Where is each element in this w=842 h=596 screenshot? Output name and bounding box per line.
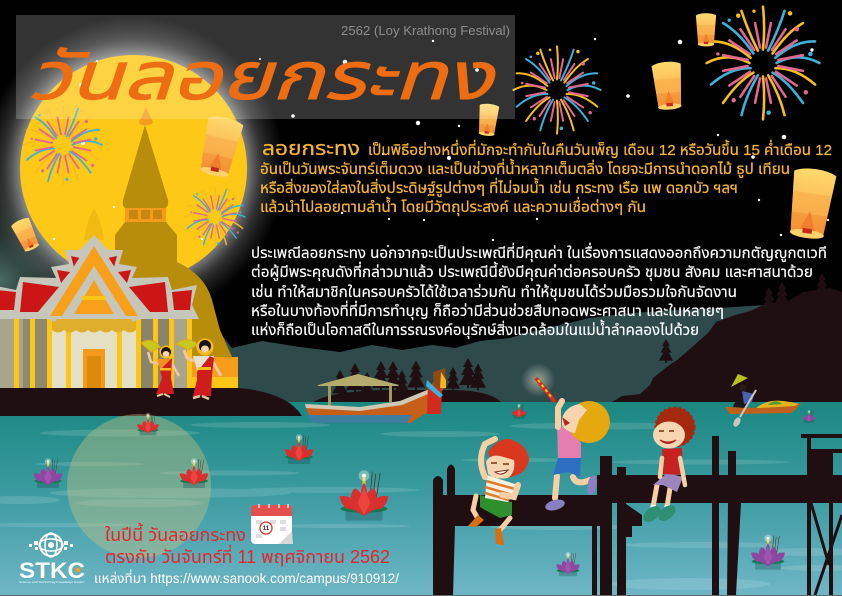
stupa xyxy=(115,107,238,388)
sky lantern centre xyxy=(651,61,685,111)
subtitle: 2562 (Loy Krathong Festival) xyxy=(341,23,510,38)
krathong purple bottom right xyxy=(751,535,785,570)
dancer left xyxy=(141,340,179,397)
water ripples xyxy=(0,422,842,590)
sky lantern moon xyxy=(196,114,244,179)
intro paragraph gold: เป็นพิธีอย่างหนึ่งที่มักจะทำกันในคืนวันเพ็ญ เดือน 12 หรือวันขึ้น 15 ค่ำเดือน 12 xyxy=(368,139,832,159)
firework top right xyxy=(707,7,819,119)
calendar icon xyxy=(251,504,293,544)
temple walls and pillars xyxy=(0,312,192,388)
stupa base xyxy=(190,357,238,388)
stupa tip xyxy=(139,107,153,125)
boy in red shirt xyxy=(640,408,694,525)
temple central gable xyxy=(42,235,146,322)
intro paragraph gold xyxy=(260,138,832,216)
date text: ตรงกับ วันจันทร์ที่ 11 พฤศจิกายน 2562 xyxy=(105,544,390,567)
calendar icon: 11 xyxy=(263,526,270,532)
river xyxy=(0,402,842,596)
vegetables xyxy=(757,401,800,410)
STKC logo: Science and Technology Knowledge Center xyxy=(19,580,84,584)
STKC logo: STKC xyxy=(19,558,85,583)
intro paragraph gold: อันเป็นวันพระจันทร์เต็มดวง และเป็นช่วงที่น้ำหลากเต็มตลิ่ง โดยจะมีการนำดอกไม้ ธูป เทียน xyxy=(260,158,790,178)
distant teal mountains xyxy=(200,300,842,410)
intro paragraph gold: แล้วนำไปลอยตามลำน้ำ โดยมีวัตถุประสงค์ และความเชื่อต่างๆ กัน xyxy=(260,196,646,216)
intro paragraph gold: หรือสิ่งของใส่ลงในสิ่งประดิษฐ์รูปต่างๆ ที่ไม่จมน้ำ เช่น กระทง เรือ แพ ดอกบัว ฯลฯ xyxy=(260,177,738,197)
logo emblem xyxy=(29,533,73,557)
title: วันลอยกระทง xyxy=(28,39,495,113)
small island xyxy=(313,390,502,403)
long-tail boat xyxy=(305,368,446,423)
firework top centre xyxy=(513,46,601,134)
temple xyxy=(0,208,199,388)
bottom edge xyxy=(0,595,842,596)
moon glow xyxy=(0,16,285,320)
firework in moon upper xyxy=(24,106,102,184)
sky lantern small left xyxy=(10,216,42,254)
stupa windows band xyxy=(125,208,166,222)
boat roof xyxy=(318,374,399,406)
boy with sparkler xyxy=(521,363,610,512)
riverbank xyxy=(0,388,302,416)
firework in moon lower xyxy=(185,187,245,247)
krathong red far centre xyxy=(137,413,159,435)
krathong red large xyxy=(340,470,388,521)
STKC logo xyxy=(19,533,85,584)
sky lantern top xyxy=(696,13,716,46)
boy with striped shirt xyxy=(468,439,529,545)
body paragraph white: หรือในบางท้องที่ที่มีการทำบุญ ก็ถือว่ามีส่วนช่วยสืบทอดพระศาสนา และในหลายๆ xyxy=(251,300,724,320)
moon xyxy=(20,55,247,282)
paddler boat xyxy=(725,374,802,428)
temple door xyxy=(83,349,105,388)
wooden pier xyxy=(433,434,842,595)
body paragraph white xyxy=(251,242,827,339)
moon reflection xyxy=(67,414,211,558)
dancer right xyxy=(176,338,221,399)
krathong red far right xyxy=(285,434,313,464)
body paragraph white: ต่อผู้มีพระคุณดังที่กล่าวมาแล้ว ประเพณีนี้ยังมีคุณค่าต่อครอบครัว ชุมชน สังคม และศาสนาด้วย xyxy=(251,261,813,281)
body paragraph white: เช่น ทำให้สมาชิกในครอบครัวได้ใช้เวลาร่วมกัน ทำให้ชุมชนได้ร่วมมือรวมใจกันจัดงาน xyxy=(251,283,737,301)
forest trees xyxy=(332,273,829,396)
krathong red reflection xyxy=(180,458,208,488)
title band xyxy=(16,15,515,119)
dark right mountain xyxy=(612,288,842,410)
sky lantern right xyxy=(785,166,837,241)
left side fog xyxy=(0,130,140,390)
krathong red tiny xyxy=(512,404,526,419)
boat ribbons xyxy=(426,368,446,414)
keyword: ลอยกระทง xyxy=(262,138,360,160)
krathong purple tiny xyxy=(803,410,815,423)
body paragraph white: ประเพณีลอยกระทง นอกจากจะเป็นประเพณีที่มีคุณค่า ในเรื่องการแสดงออกถึงความกตัญญูกตเวที xyxy=(251,242,827,262)
stars xyxy=(53,38,829,247)
date text: ในปีนี้ วันลอยกระทง xyxy=(105,522,246,545)
source line: แหล่งที่มา https://www.sanook.com/campus/910912/ xyxy=(94,569,399,586)
krathong purple left xyxy=(34,458,62,488)
sky lantern under title xyxy=(477,103,499,137)
date text xyxy=(105,522,390,567)
temple roof tiers xyxy=(0,235,199,319)
krathong purple bottom xyxy=(556,552,580,576)
body paragraph white: แห่งก็ถือเป็นโอกาสดีในการรณรงค์อนุรักษ์สิ่งแวดล้อมในแม่น้ำลำคลองไปด้วย xyxy=(251,319,699,339)
